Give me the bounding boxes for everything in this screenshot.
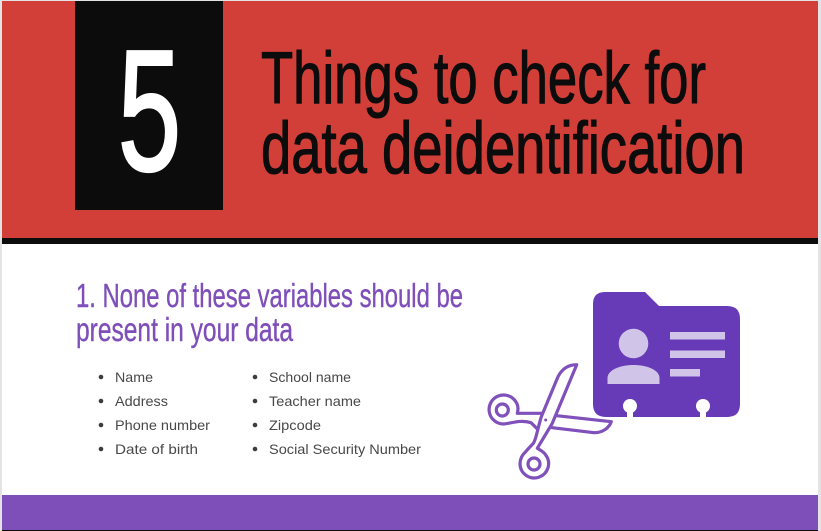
section heading: 1. None of these variables should be bbox=[76, 277, 463, 314]
bullet list: right column: School name bbox=[269, 369, 351, 385]
bullet list: right column bbox=[253, 369, 421, 457]
bullet list: right column: Teacher name bbox=[269, 393, 361, 409]
bullet list: left column: Name bbox=[115, 369, 153, 385]
bullet list: left column: Phone number bbox=[115, 417, 210, 433]
header banner bbox=[2, 1, 818, 244]
section heading bbox=[76, 277, 463, 348]
title bbox=[261, 38, 745, 189]
bullet list: right column: Zipcode bbox=[269, 417, 321, 433]
number box bbox=[75, 1, 223, 210]
icon: scissors bbox=[489, 365, 611, 478]
bullet list: left column bbox=[99, 369, 210, 457]
bullet list: right column: Social Security Number bbox=[269, 441, 421, 457]
icon: contact folder bbox=[593, 292, 740, 418]
number box: 5 bbox=[118, 15, 181, 207]
bullet list: left column: Date of birth bbox=[115, 441, 198, 457]
section heading: present in your data bbox=[76, 311, 293, 348]
footer band bbox=[2, 495, 818, 531]
bullet list: left column: Address bbox=[115, 393, 168, 409]
